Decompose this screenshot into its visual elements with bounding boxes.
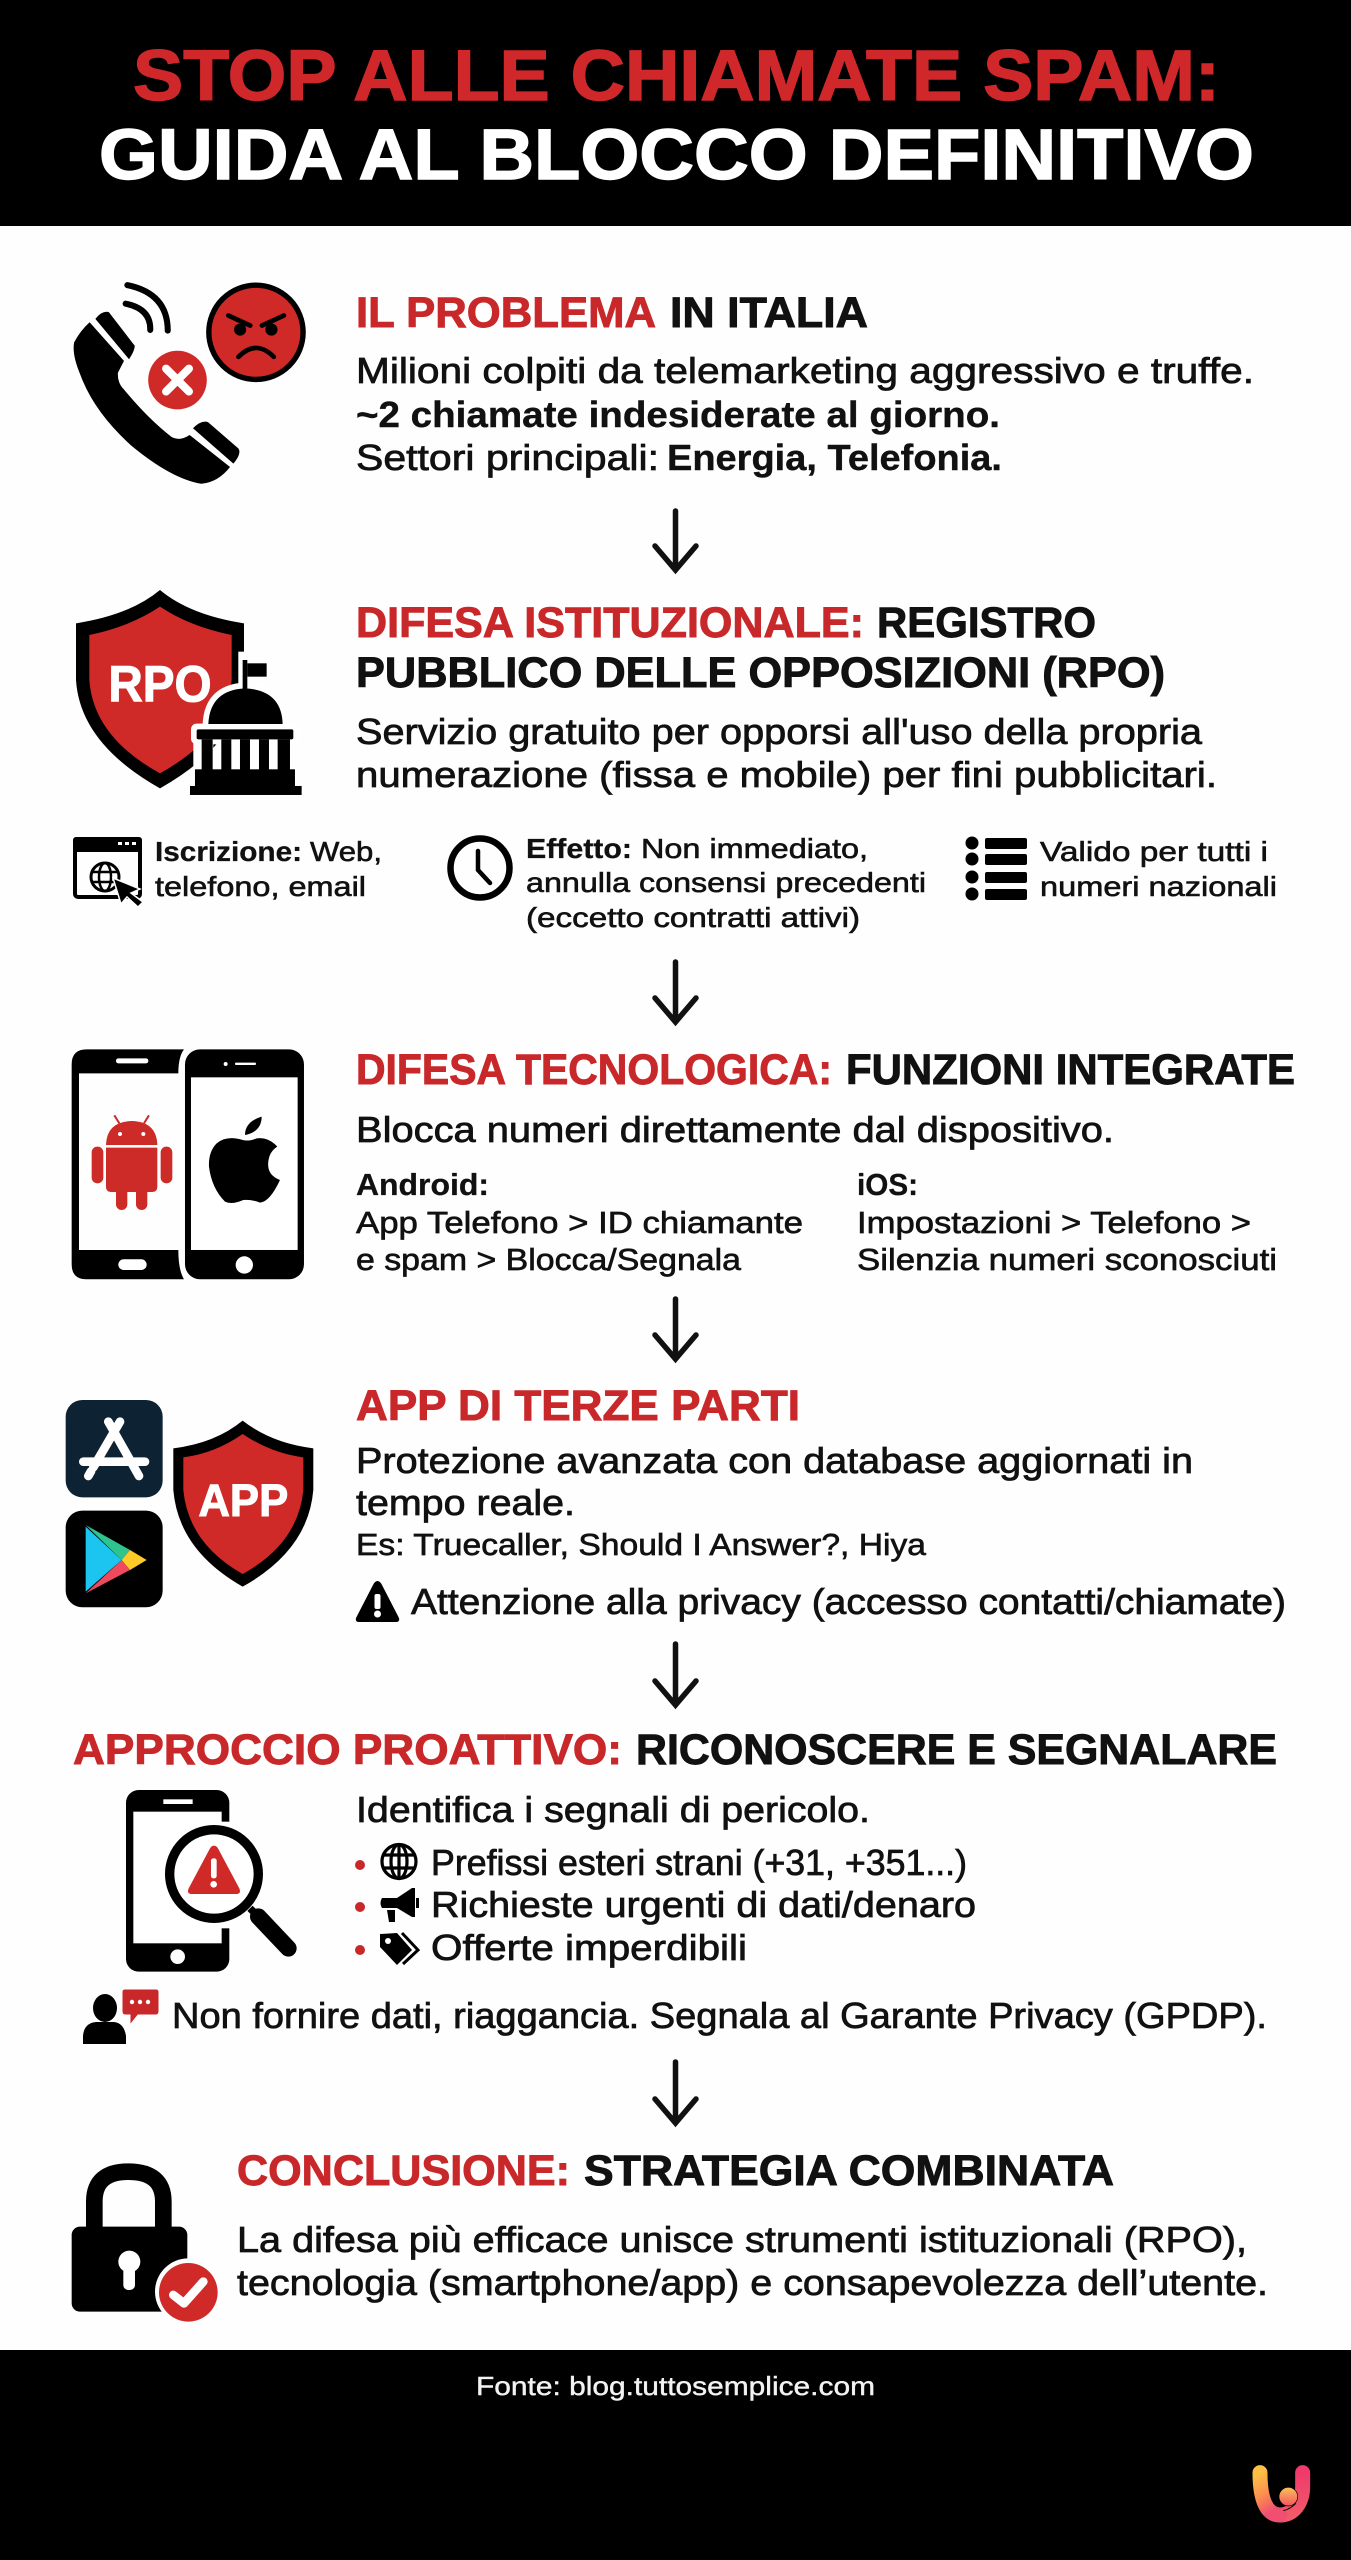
text: effetto: annulla consensi precedenti xyxy=(526,867,926,898)
icon: logo xyxy=(1260,2473,1303,2515)
text: conclusione body xyxy=(237,2219,1268,2303)
text: problema body: Milioni colpiti da telemarketing aggressivo e truffe. xyxy=(356,350,1254,391)
text: ios steps: Silenzia numeri sconosciuti xyxy=(857,1242,1277,1277)
panel: approccio proattivo xyxy=(73,1726,1277,2044)
title line 1: STOP ALLE CHIAMATE SPAM: xyxy=(133,37,1220,116)
text: protezione avanzata: Es: Truecaller, Should I Answer?, Hiya xyxy=(356,1527,927,1562)
heading: app di terze parti: APP DI TERZE PARTI xyxy=(356,1382,800,1430)
header band xyxy=(0,0,1351,226)
text: android steps xyxy=(356,1167,803,1277)
text: richieste: Richieste urgenti di dati/denaro xyxy=(431,1884,976,1925)
footer band xyxy=(0,2350,1351,2560)
text: conclusione body: La difesa più efficace unisce strumenti istituzionali (RPO), xyxy=(237,2219,1247,2260)
text: iscrizione xyxy=(155,836,382,902)
heading: approccio proattivo: RICONOSCERE E SEGNALARE xyxy=(636,1726,1277,1774)
icon: warning triangle xyxy=(356,1581,399,1622)
arrow 5 xyxy=(655,2062,696,2123)
list: segnali di pericolo xyxy=(355,1842,976,1968)
text: problema body xyxy=(356,350,1254,478)
text: protezione avanzata: tempo reale. xyxy=(356,1482,575,1523)
icon: RPO shield with building xyxy=(76,590,302,795)
text: RPO body: Servizio gratuito per opporsi all'uso della propria xyxy=(356,711,1203,752)
heading: difesa istituzionale: PUBBLICO DELLE OPPOSIZIONI (RPO) xyxy=(356,649,1165,697)
heading: il problema xyxy=(356,289,868,337)
text: blocca numeri: Blocca numeri direttamente dal dispositivo. xyxy=(356,1109,1114,1150)
text: iscrizione: Iscrizione: xyxy=(155,836,302,867)
heading: difesa tecnologica: FUNZIONI INTEGRATE xyxy=(846,1046,1295,1094)
panel: difesa tecnologica xyxy=(72,1046,1295,1279)
icon: tags xyxy=(380,1933,418,1965)
heading: il problema: IL PROBLEMA xyxy=(356,289,656,337)
text: conclusione body: tecnologia (smartphone/app) e consapevolezza dell’utente. xyxy=(237,2262,1268,2303)
icon: android and iphone phones xyxy=(72,1049,304,1279)
icon: app store, play store, app shield xyxy=(66,1400,313,1607)
icon: person with chat bubble xyxy=(83,1989,159,2044)
heading: difesa istituzionale: DIFESA ISTITUZIONALE: xyxy=(356,599,864,647)
heading: approccio proattivo xyxy=(73,1726,1277,1774)
heading: conclusione: CONCLUSIONE: xyxy=(237,2147,570,2195)
icon: megaphone xyxy=(380,1888,419,1922)
text: valido: Valido per tutti i xyxy=(1040,836,1268,867)
heading: il problema: IN ITALIA xyxy=(670,289,868,337)
arrow 4 xyxy=(655,1644,696,1705)
heading: difesa istituzionale: REGISTRO xyxy=(877,599,1096,647)
arrow 3 xyxy=(655,1299,696,1359)
panel: app di terze parti xyxy=(66,1382,1286,1622)
icon: globe xyxy=(382,1844,416,1878)
icon: phone with magnifier xyxy=(126,1790,288,1972)
text: iscrizione: telefono, email xyxy=(155,871,366,902)
text: ios steps xyxy=(857,1167,1277,1277)
text: valido: numeri nazionali xyxy=(1040,871,1277,902)
text: effetto xyxy=(526,833,926,933)
text: fonte: Fonte: blog.tuttosemplice.com xyxy=(476,2371,875,2401)
text: protezione avanzata xyxy=(356,1440,1193,1562)
text: problema body: Settori principali: xyxy=(356,437,659,478)
panel: il problema xyxy=(74,285,1254,484)
icon: list xyxy=(966,836,1027,900)
text: effetto: Effetto: xyxy=(526,833,632,864)
text: android steps: App Telefono > ID chiamante xyxy=(356,1205,803,1240)
text: effetto: (eccetto contratti attivi) xyxy=(526,902,860,933)
arrow 1 xyxy=(655,511,696,570)
heading: difesa tecnologica xyxy=(356,1046,1295,1094)
icon: clock xyxy=(450,838,510,898)
text: effetto: Non immediato, xyxy=(641,833,868,864)
heading: approccio proattivo: APPROCCIO PROATTIVO: xyxy=(73,1726,622,1774)
text: non fornire dati: Non fornire dati, riaggancia. Segnala al Garante Privacy (GPDP). xyxy=(172,1995,1267,2036)
icon: RPO shield with building: RPO xyxy=(108,656,212,713)
heading: conclusione: STRATEGIA COMBINATA xyxy=(584,2147,1114,2195)
title line 2: GUIDA AL BLOCCO DEFINITIVO xyxy=(99,116,1254,195)
text: valido xyxy=(1040,836,1277,902)
panel: conclusione xyxy=(72,2147,1268,2325)
icon: phone with angry face xyxy=(74,285,303,484)
text: protezione avanzata: Protezione avanzata con database aggiornati in xyxy=(356,1440,1193,1481)
arrow 2 xyxy=(655,962,696,1022)
heading: difesa istituzionale xyxy=(356,599,1165,697)
text: RPO body: numerazione (fissa e mobile) per fini pubblicitari. xyxy=(356,754,1217,795)
text: ios steps: Impostazioni > Telefono > xyxy=(857,1205,1251,1240)
heading: conclusione xyxy=(237,2147,1114,2195)
text: problema body: ~2 chiamate indesiderate al giorno. xyxy=(356,394,1000,435)
icon: app store, play store, app shield: APP xyxy=(198,1475,288,1526)
icon: web window with cursor xyxy=(73,837,143,907)
text: ios steps: iOS: xyxy=(857,1167,918,1202)
text: RPO body xyxy=(356,711,1217,795)
icon: padlock with check xyxy=(72,2172,222,2325)
text: android steps: Android: xyxy=(356,1167,489,1202)
text: identifica: Identifica i segnali di pericolo. xyxy=(356,1789,870,1830)
text: prefissi: Prefissi esteri strani (+31, +351...) xyxy=(431,1842,967,1883)
text: android steps: e spam > Blocca/Segnala xyxy=(356,1242,742,1277)
text: privacy warning: Attenzione alla privacy (accesso contatti/chiamate) xyxy=(411,1581,1286,1622)
text: iscrizione: Web, xyxy=(310,836,382,867)
heading: difesa tecnologica: DIFESA TECNOLOGICA: xyxy=(356,1046,832,1094)
panel: difesa istituzionale xyxy=(73,590,1277,933)
text: problema body: Energia, Telefonia. xyxy=(667,437,1002,478)
text: offerte: Offerte imperdibili xyxy=(431,1927,747,1968)
